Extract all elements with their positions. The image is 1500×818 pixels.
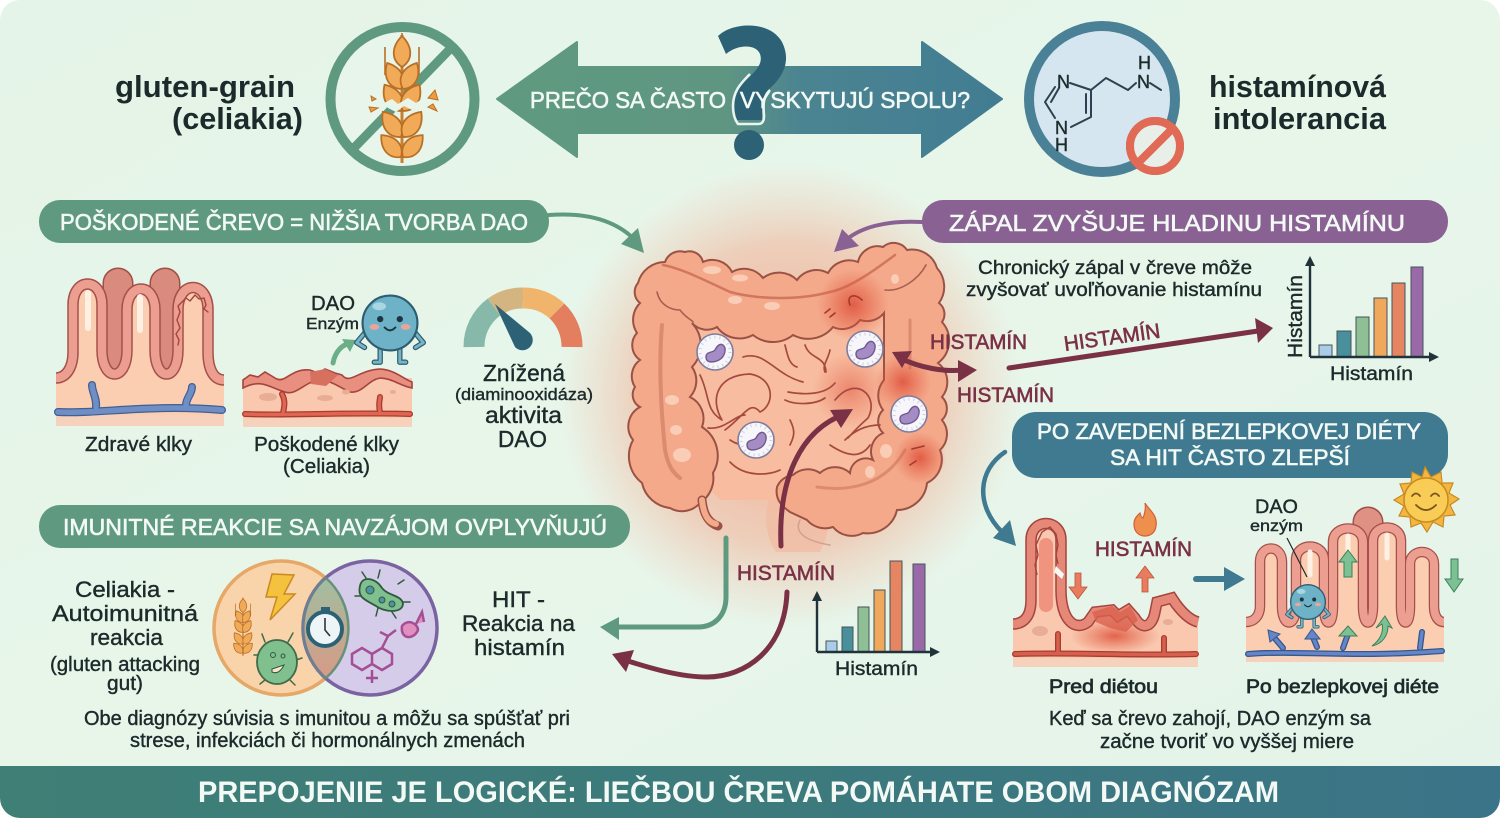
icon: DAO enzyme with label: Enzým <box>306 316 359 333</box>
icon: histamine molecule: N <box>1137 72 1150 92</box>
bar chart: right: Histamín <box>1330 364 1413 385</box>
icon: stopwatch <box>308 607 342 646</box>
arrow: histamine up <box>1136 566 1154 592</box>
icon: enzyme on villi <box>1287 585 1329 627</box>
bar chart: bottom: Histamín <box>835 659 918 680</box>
pill: gluten-free diet heading: PO ZAVEDENÍ BEZLEPKOVEJ DIÉTY <box>1037 419 1421 444</box>
text: shared triggers: Obe diagnózy súvisia s imunitou a môžu sa spúšťať pri <box>84 708 570 730</box>
heading: gluten-grain <box>115 69 303 136</box>
label: healthy villi: Zdravé klky <box>85 434 192 456</box>
icon: lightning <box>266 574 295 620</box>
arrow: histamine to chart <box>1009 318 1273 368</box>
arrow: green to colon <box>549 214 644 253</box>
arrow: maroon back to text <box>612 592 787 677</box>
text: reduced DAO activity: Znížená <box>483 360 565 386</box>
heading: histamine intolerance: intolerancia <box>1213 101 1387 136</box>
text: chronic inflammation: Chronický zápal v čreve môže <box>978 258 1252 279</box>
footer banner <box>0 766 1500 818</box>
label: histamine bottom: HISTAMÍN <box>737 562 835 585</box>
icon: immune cell 3 <box>891 396 927 432</box>
footer banner: PREPOJENIE JE LOGICKÉ: LIEČBOU ČREVA POMÁHATE OBOM DIAGNÓZAM <box>198 775 1279 809</box>
text: shared triggers <box>84 708 570 752</box>
pill: immune reactions heading <box>39 505 630 548</box>
icon: flame <box>1134 503 1156 536</box>
labels: histamine near colon: HISTAMÍN <box>957 384 1054 407</box>
icon: bacterium <box>355 570 410 618</box>
arrow: purple to colon <box>834 222 922 252</box>
double arrow with question <box>497 25 1002 160</box>
icon: gauge <box>474 298 572 350</box>
text: celiac autoimmune: gut) <box>107 673 143 695</box>
icon: histamine molecule: H <box>1138 53 1151 73</box>
bar chart: bottom <box>812 561 940 680</box>
icon: sun <box>1394 467 1459 532</box>
heading: histamine intolerance: histamínová <box>1209 69 1387 104</box>
text: reduced DAO activity: DAO <box>498 426 547 452</box>
icon: immune cell 2 <box>847 331 883 367</box>
text: celiac autoimmune: Celiakia - <box>75 577 175 602</box>
text: enzyme recovery: začne tvoriť vo vyššej miere <box>1100 731 1354 753</box>
pill: damaged gut heading: POŠKODENÉ ČREVO = NIŽŠIA TVORBA DAO <box>60 208 528 235</box>
arrow: green down <box>1445 559 1463 592</box>
arrow: histamine into colon <box>781 409 853 546</box>
text: HIT reaction: histamín <box>474 635 565 660</box>
icon: small wheat <box>231 597 255 656</box>
icon: histamine molecule <box>1029 26 1184 175</box>
arrow: before to after <box>1196 567 1245 591</box>
text: chronic inflammation <box>966 258 1262 301</box>
text: celiac autoimmune: (gluten attacking <box>50 654 200 676</box>
text: reduced DAO activity <box>455 360 593 452</box>
text: reduced DAO activity: (diaminooxidáza) <box>455 385 593 404</box>
text: enzyme recovery <box>1049 708 1372 753</box>
pill: inflammation heading: ZÁPAL ZVYŠUJE HLADINU HISTAMÍNU <box>949 209 1405 236</box>
illustration: healthy villi <box>56 283 224 426</box>
pill: immune reactions heading: IMUNITNÉ REAKCIE SA NAVZÁJOM OVPLYVŇUJÚ <box>63 514 607 540</box>
labels: histamine near colon <box>930 320 1162 407</box>
icon: immune cell 4 <box>738 422 774 458</box>
text: reduced DAO activity: aktivita <box>485 402 562 428</box>
heading: gluten-grain: gluten-grain <box>115 69 295 104</box>
text: celiac autoimmune <box>50 577 200 695</box>
text: celiac autoimmune: reakcia <box>90 625 164 650</box>
label: damaged villi: (Celiakia) <box>283 456 370 478</box>
bar chart: right <box>1285 256 1439 385</box>
illustration: before diet <box>1013 524 1198 667</box>
icon: germ <box>254 633 302 685</box>
text: HIT reaction <box>462 587 576 660</box>
pill: inflammation heading <box>922 200 1448 243</box>
arrow: green back to text <box>600 538 726 640</box>
icon: crossed-out wheat <box>330 27 474 171</box>
pill: damaged gut heading <box>39 200 549 243</box>
labels: histamine near colon: HISTAMÍN <box>1062 320 1162 356</box>
label: histamine flame: HISTAMÍN <box>1095 538 1192 561</box>
icon: question mark <box>718 25 786 160</box>
text: chronic inflammation: zvyšovať uvoľňovanie histamínu <box>966 280 1262 301</box>
icon: immune cell 1 <box>697 334 733 370</box>
text: HIT reaction: HIT - <box>492 587 545 612</box>
illustration: colon <box>558 163 1022 627</box>
icon: prohibition sign <box>1126 117 1184 175</box>
pill: gluten-free diet heading <box>1012 412 1448 478</box>
labels: histamine near colon: HISTAMÍN <box>930 331 1027 354</box>
icon: DAO enzyme with label: DAO <box>311 293 355 315</box>
illustration: damaged villi <box>243 369 412 427</box>
icon: histamine molecule: H <box>1055 135 1068 155</box>
text: HIT reaction: Reakcia na <box>462 611 576 636</box>
text: DAO enzyme right: DAO <box>1255 497 1298 518</box>
illustration: after diet <box>1246 522 1444 662</box>
label: damaged villi <box>254 434 399 478</box>
arrow: down small <box>1069 573 1087 599</box>
text: DAO enzyme right <box>1250 497 1307 577</box>
icon: hormone molecule <box>352 612 424 683</box>
double arrow with question: PREČO SA ČASTO <box>530 86 726 113</box>
icon: histamine molecule: N <box>1055 118 1068 138</box>
venn diagram <box>214 561 437 695</box>
heading: histamine intolerance <box>1209 69 1387 136</box>
label: after diet: Po bezlepkovej diéte <box>1246 677 1439 698</box>
label: damaged villi: Poškodené klky <box>254 434 399 456</box>
text: celiac autoimmune: Autoimunitná <box>52 601 199 626</box>
arrow: pill to before illustration <box>983 452 1016 546</box>
text: enzyme recovery: Keď sa črevo zahojí, DAO enzým sa <box>1049 708 1372 730</box>
pill: gluten-free diet heading: SA HIT ČASTO ZLEPŠÍ <box>1110 445 1351 470</box>
heading: gluten-grain: (celiakia) <box>172 101 303 136</box>
text: DAO enzyme right: enzým <box>1250 518 1303 535</box>
double arrow with question: VYSKYTUJÚ SPOLU? <box>740 87 970 113</box>
icon: histamine molecule: N <box>1057 72 1070 92</box>
label: before diet: Pred diétou <box>1049 677 1158 698</box>
icon: DAO enzyme with label <box>306 293 423 363</box>
text: shared triggers: strese, infekciách či hormonálnych zmenách <box>130 730 525 752</box>
bar chart: right: Histamín <box>1285 275 1307 358</box>
arrow: double-headed histamine <box>892 351 977 382</box>
